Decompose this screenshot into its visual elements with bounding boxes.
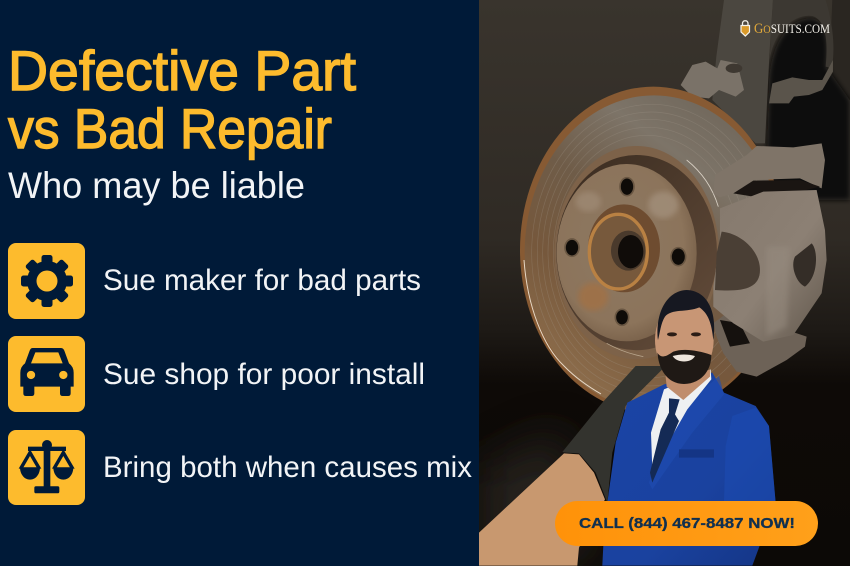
bolt holes bbox=[565, 178, 686, 325]
subtitle: Who may be liable bbox=[8, 165, 305, 206]
label: sue maker: Sue maker for bad parts bbox=[103, 264, 421, 297]
title bbox=[8, 39, 356, 160]
suit bbox=[602, 369, 776, 566]
icon: lock shield bbox=[741, 21, 750, 36]
shock absorber and upper bracket bbox=[681, 0, 850, 200]
call to action button: CALL (844) 467-8487 NOW! bbox=[579, 515, 795, 532]
list item: sue shop bbox=[8, 336, 425, 412]
label: bring both: Bring both when causes mix bbox=[103, 451, 472, 484]
call to action button bbox=[555, 501, 818, 546]
panel: navy text background bbox=[0, 0, 479, 566]
title: vs Bad Repair bbox=[8, 97, 332, 160]
rotor disc bbox=[520, 87, 787, 413]
centre bore bbox=[588, 204, 660, 292]
label: sue shop: Sue shop for poor install bbox=[103, 358, 425, 391]
gloved hand and forearm bbox=[479, 366, 666, 566]
title: Defective Part bbox=[8, 39, 356, 102]
brake caliper bbox=[713, 143, 827, 377]
hub flange bbox=[557, 164, 697, 341]
attorney portrait bbox=[602, 290, 776, 566]
head bbox=[655, 290, 714, 400]
photo: brake rotor and caliper bbox=[479, 0, 850, 566]
list item: bring both bbox=[8, 430, 472, 505]
icon: scales bbox=[8, 430, 85, 505]
wordmark: GOSUITS.COM bbox=[754, 21, 830, 37]
icon: gear bbox=[8, 243, 85, 319]
logo: GoSuits.com bbox=[741, 21, 830, 37]
icon: car bbox=[8, 336, 85, 412]
list item: sue maker bbox=[8, 243, 421, 319]
